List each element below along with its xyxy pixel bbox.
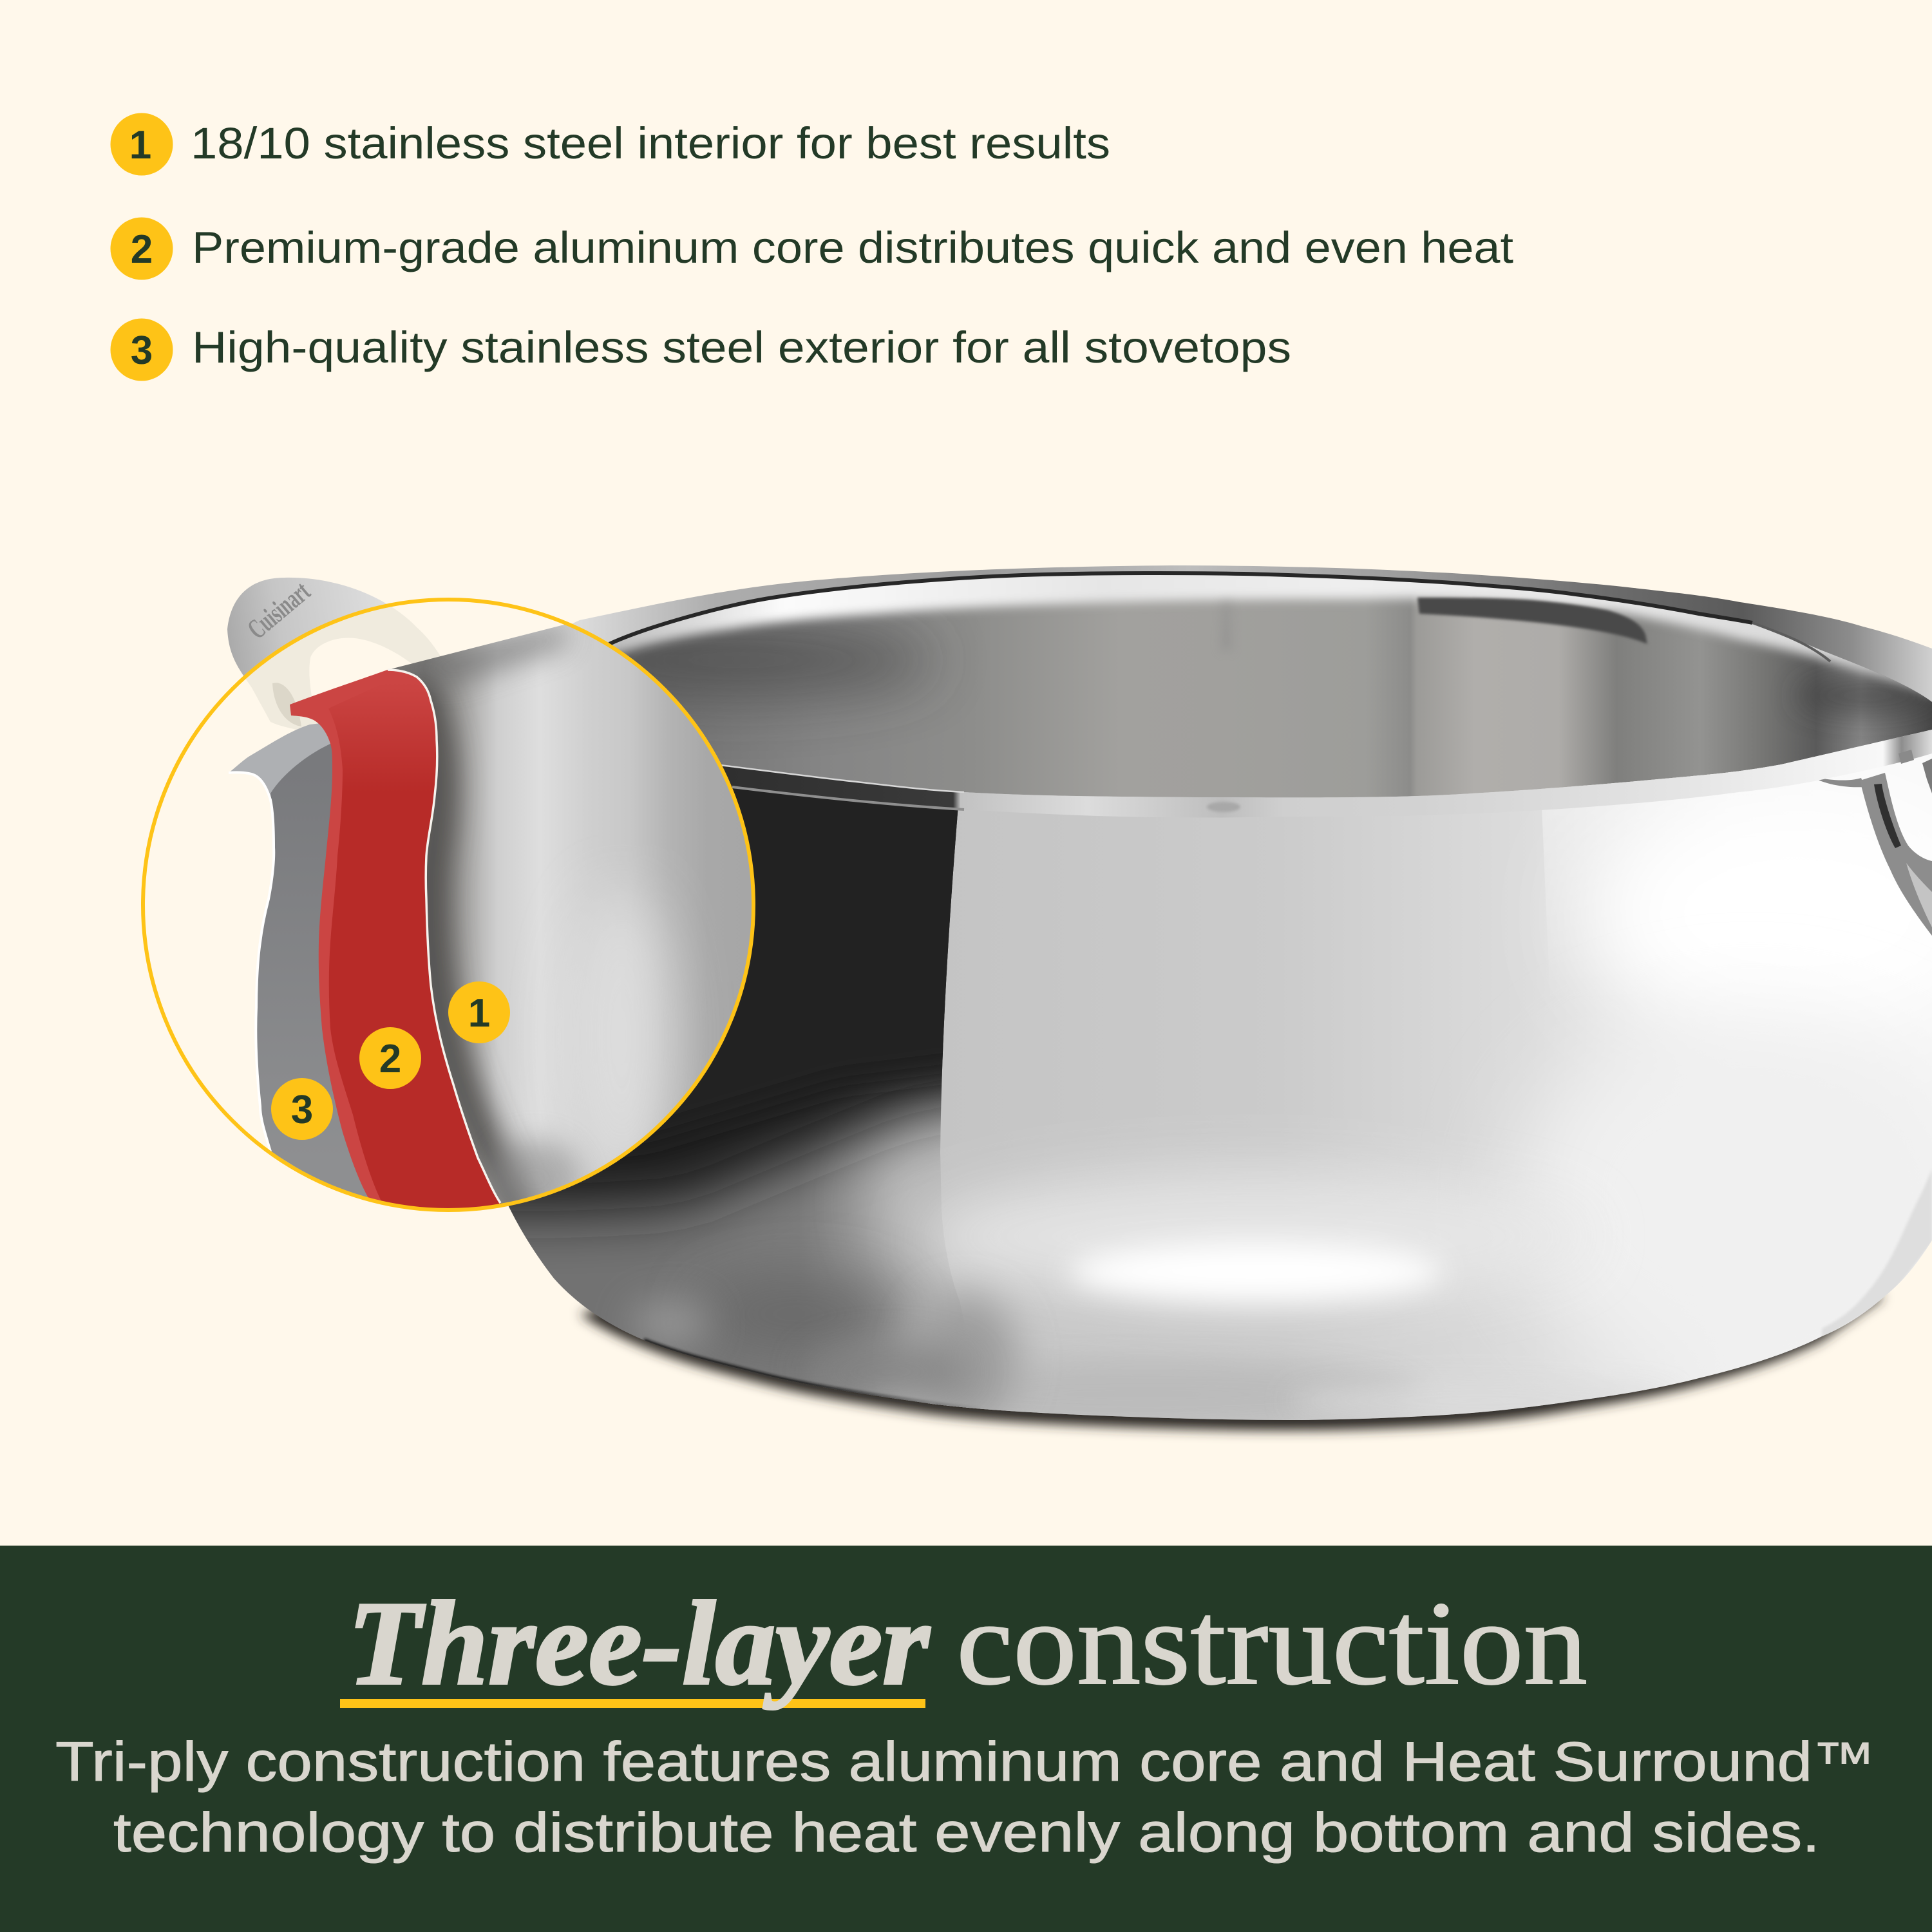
handle seen through lens (227, 578, 451, 731)
description (55, 1731, 1875, 1864)
right edge shade (1822, 1169, 1932, 1340)
upper right glare (1541, 728, 1932, 1043)
lens fill (143, 600, 753, 1210)
left handle (227, 575, 451, 731)
feature 3 (111, 318, 1291, 381)
lens badge 1 (448, 981, 510, 1043)
bottom highlight core (1069, 1242, 1443, 1302)
description: technology to distribute heat evenly along bottom and sides. (113, 1802, 1820, 1864)
description: Tri-ply construction features aluminum core and Heat Surround™ (55, 1731, 1875, 1793)
lower soft spread (921, 1172, 1591, 1301)
cross-section magnifier lens (143, 578, 773, 1224)
white edge line (388, 670, 500, 1203)
feature 1 (111, 113, 1110, 175)
right handle (1810, 759, 1932, 936)
steel lower shade (489, 1140, 580, 1217)
lower base shade (869, 1361, 1423, 1428)
cookware pot photo illustration (227, 565, 1932, 1430)
layer 3: exterior steel cross section (229, 708, 451, 1224)
steel top shade (388, 625, 567, 683)
layer 1: interior steel surface (386, 580, 773, 1224)
right side soft light (1520, 1018, 1932, 1378)
lens badge 3 (271, 1078, 333, 1140)
lens ring (143, 600, 753, 1210)
heading: Three-layer (348, 1577, 931, 1710)
steel edge shadow (412, 683, 525, 1224)
feature 3: High-quality stainless steel exterior for all stovetops (192, 323, 1291, 372)
back wall dark reflection (1417, 598, 1647, 644)
lens badge 3: 3 (291, 1088, 313, 1132)
pot interior (612, 575, 1932, 797)
steel lower highlight (570, 889, 673, 1185)
feature 1: 18/10 stainless steel interior for best results (191, 118, 1110, 168)
rim thin line right (1752, 623, 1830, 661)
lens badge 1: 1 (468, 991, 490, 1036)
bottom banner (0, 1546, 1932, 1932)
lens badge 2: 2 (379, 1037, 401, 1081)
pot ground shadow (580, 1224, 1884, 1430)
left reflection zone (509, 784, 976, 1409)
feature 2: 2 (131, 227, 153, 272)
feature 2: Premium-grade aluminum core distributes quick and even heat (192, 223, 1513, 272)
heading: construction (956, 1577, 1587, 1710)
pot front rim (720, 730, 1932, 818)
feature 3: 3 (131, 328, 153, 373)
layer 2: aluminum core (290, 670, 515, 1224)
heading (348, 1577, 1587, 1710)
rim dark line (609, 573, 1752, 644)
feature 1: 1 (129, 123, 151, 167)
feature 2 (111, 218, 1513, 279)
feature list (111, 113, 1513, 381)
pot body exterior (451, 708, 1932, 1430)
heading underline (340, 1699, 925, 1708)
left handle: Cuisinart (242, 575, 316, 645)
lens badge 2 (359, 1027, 421, 1089)
bottom-left dark edge (644, 1340, 982, 1409)
pot rim outer band (515, 565, 1932, 773)
bright upper wall band (580, 567, 1932, 696)
